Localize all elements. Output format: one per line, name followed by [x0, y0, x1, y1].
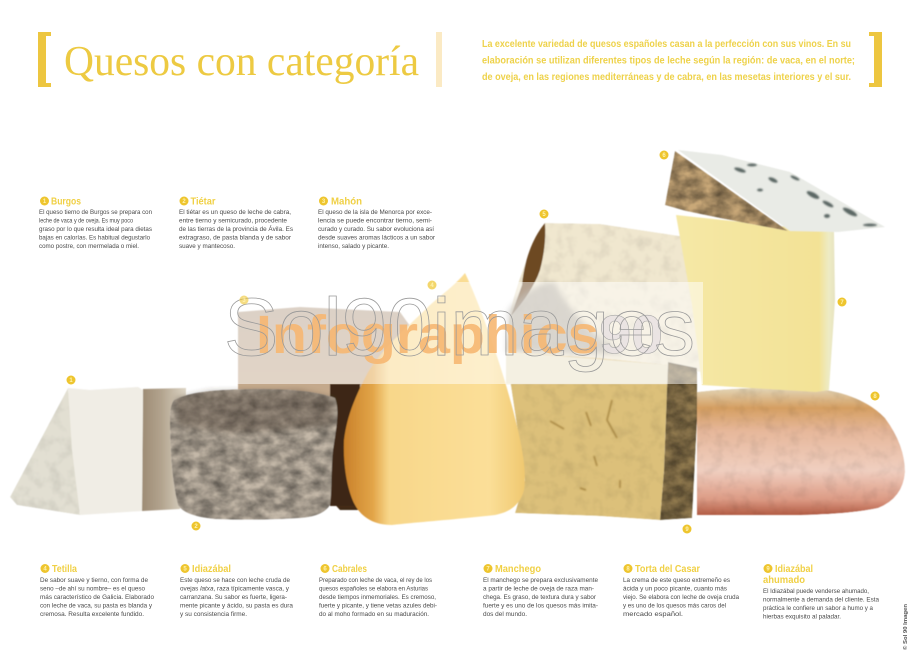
intro text: La excelente variedad de quesos españoles casan a la perfección con sus vinos. En su	[482, 39, 851, 50]
text block: Torta del Casar	[623, 563, 740, 618]
body: Tiétar: de las tierras de la provincia de Ávila. Es	[179, 226, 293, 233]
body: Tiétar	[179, 209, 293, 250]
heading: Idiazábal ahumado	[763, 563, 813, 586]
heading: Tetilla: 4	[43, 566, 47, 572]
body: Cabrales: desde tiempos inmemoriales. Es cremoso,	[319, 594, 436, 601]
body: Burgos: El queso tierno de Burgos se prepara con	[39, 209, 153, 216]
body: Cabrales: Preparado con leche de vaca, el rey de los	[319, 577, 432, 584]
text block: Tetilla	[40, 563, 155, 618]
body: Manchego: El manchego se prepara exclusivamente	[483, 577, 599, 584]
heading: Manchego: 7	[486, 566, 490, 572]
body: Idiazábal ahumado: El Idiazábal puede venderse ahumado,	[763, 588, 869, 595]
heading: Idiazábal ahumado: Idiazábal	[775, 563, 813, 575]
heading: Burgos	[40, 196, 81, 208]
body: Idiazábal ahumado	[763, 588, 880, 620]
text block: Manchego	[483, 563, 599, 618]
body: Idiazábal ahumado: hierbas exquisito al paladar.	[763, 614, 841, 620]
body: Mahón: desde suaves aromas lácticos a un sabor	[318, 234, 435, 242]
body: Torta del Casar: mercado español.	[623, 611, 683, 618]
heading: Torta del Casar: Torta del Casar	[635, 563, 700, 575]
text block: Tiétar	[179, 196, 293, 250]
body: Torta del Casar: ácida y un poco picante, cuanto más	[623, 586, 727, 592]
watermark Sol90images: Sol90images	[224, 282, 695, 373]
body: Manchego	[483, 577, 599, 618]
body: Tiétar: El tiétar es un queso de leche de cabra,	[179, 209, 291, 216]
cheese number markers: 1	[69, 378, 73, 384]
watermark panel	[225, 282, 703, 384]
title divider bar	[436, 32, 442, 87]
cheese 6: Cabrales blue wedge	[665, 150, 885, 232]
cheese number markers: 5	[542, 212, 546, 218]
cheese 3: Mahón back block	[238, 307, 420, 510]
cheese 1: Burgos white wedge	[10, 387, 186, 515]
watermark Infographics90: Infographics 90	[256, 305, 663, 365]
body: Manchego: a partir de leche de oveja de raza man-	[483, 586, 594, 592]
credit: © Sol 90 Imagen	[902, 603, 909, 650]
body: Mahón	[318, 209, 435, 250]
heading: Idiazábal ahumado: ahumado	[763, 574, 805, 586]
body: Burgos: como postre, con mermelada o miel.	[39, 243, 139, 250]
cheese number markers: 4	[430, 283, 434, 289]
heading: Mahón	[319, 196, 362, 208]
intro text: elaboración se utilizan diferentes tipos de leche según la región: de vaca, en el norte;	[482, 56, 855, 66]
heading: Tiétar: 2	[182, 199, 186, 205]
watermark	[224, 282, 703, 384]
heading: Cabrales: 6	[323, 566, 327, 572]
body: Torta del Casar: y es uno de los quesos más caros del	[623, 602, 726, 610]
body: Tetilla: seno –de ahí su nombre– es el queso	[40, 586, 146, 592]
body: Torta del Casar	[623, 577, 740, 618]
cheese group photo	[10, 150, 905, 525]
body: Mahón: El queso de la isla de Menorca por exce-	[318, 209, 432, 216]
heading: Burgos: 1	[43, 199, 47, 205]
body: Cabrales: fuerte y picante, y tiene vetas azules debi-	[319, 602, 437, 610]
body: Idiazábal ahumado: práctica le confiere un sabor a humo y a	[763, 605, 874, 612]
body: Mahón: lencia se puede encontrar tierno, semi-	[318, 218, 432, 224]
heading: Tetilla: Tetilla	[52, 563, 77, 575]
cheese number markers: 2	[194, 524, 198, 530]
heading: Cabrales: Cabrales	[332, 563, 367, 575]
body: Manchego: fuerte y es uno de los quesos más imita-	[483, 602, 598, 610]
body: Cabrales: do al moho formado en su maduración.	[319, 611, 429, 618]
body: Tiétar: entre tierno y semicurado, procedente	[179, 218, 288, 224]
heading: Idiazábal: 5	[183, 566, 187, 572]
body: Idiazábal	[180, 577, 294, 618]
shadow behind round cheese	[330, 384, 360, 506]
text block: Mahón	[318, 196, 435, 250]
cheese 4: Tetilla yellow wedge	[344, 273, 525, 525]
cheese number markers: 7	[840, 300, 844, 306]
body: Burgos: leche de vaca y de oveja. Es muy poco	[39, 218, 133, 224]
right bracket	[869, 32, 882, 87]
body: Tetilla: más característico de Galicia. Elaborado	[40, 594, 155, 601]
text block: Cabrales	[319, 563, 437, 618]
heading: Idiazábal: Idiazábal	[192, 563, 231, 575]
header	[38, 32, 882, 87]
heading: Burgos: Burgos	[51, 196, 81, 208]
body: Burgos: graso por lo que resulta ideal para dietas	[39, 226, 152, 233]
body: Idiazábal ahumado: normalmente a demanda del cliente. Esta	[763, 596, 880, 604]
body: Burgos	[39, 209, 153, 250]
heading: Mahón: Mahón	[331, 196, 362, 208]
cheese number markers: 9	[685, 527, 689, 533]
heading: Tiétar	[180, 196, 216, 208]
body: Manchego: dos del mundo.	[483, 611, 527, 618]
body: Burgos: bajas en calorías. Es habitual degustarlo	[39, 234, 151, 242]
text block: Idiazábal	[180, 563, 294, 618]
left bracket	[38, 32, 51, 87]
cheese 9: Idiazábal ahumado block	[506, 352, 697, 520]
cheese number markers: 8	[873, 394, 877, 400]
cheese number markers	[66, 150, 880, 534]
text block: Idiazábal ahumado	[763, 563, 880, 620]
body: Idiazábal: mente picante y ácido, su pasta es dura	[180, 602, 294, 610]
body: Cabrales: quesos españoles se elabora en Asturias	[319, 586, 428, 592]
intro text: de oveja, en las regiones mediterráneas y de cabra, en las mesetas interiores y el sur.	[482, 72, 851, 83]
body: Cabrales	[319, 577, 437, 618]
heading: Tiétar: Tiétar	[190, 196, 216, 208]
cheese number markers: 6	[662, 153, 666, 159]
cheese 2: Tiétar round	[170, 389, 337, 520]
body: Tetilla: con leche de vaca, su pasta es blanda y	[40, 602, 153, 610]
cheese 5: Idiazábal top wedge	[505, 223, 702, 372]
body: Tiétar: extragraso, de pasta blanda y de sabor	[179, 234, 291, 242]
heading: Idiazábal	[180, 563, 231, 575]
body: Idiazábal: ovejas latxa, raza típicamente vasca, y	[180, 586, 290, 592]
body: Torta del Casar: La crema de este queso extremeño es	[623, 577, 730, 584]
body: Tetilla: cremosa. Resulta excelente fundido.	[40, 611, 144, 618]
heading: Torta del Casar: 8	[626, 566, 630, 572]
heading: Idiazábal ahumado: 9	[766, 566, 770, 572]
heading: Mahón: 3	[322, 199, 326, 205]
cheese 8: Torta del Casar pink round	[697, 388, 905, 515]
cheese 7: Manchego yellow block	[676, 215, 835, 392]
body: Tetilla: De sabor suave y tierno, con forma de	[40, 577, 149, 584]
heading: Manchego: Manchego	[495, 563, 541, 575]
body: Tetilla	[40, 577, 155, 618]
body: Mahón: curado y curado. Su sabor evoluciona así	[318, 226, 434, 233]
body: Idiazábal: carranzana. Su sabor es fuerte, ligera-	[180, 594, 287, 601]
body: Tiétar: suave y mantecoso.	[179, 243, 235, 250]
title: Quesos con categoría	[64, 39, 419, 85]
body: Idiazábal: y su consistencia firme.	[180, 611, 247, 618]
body: Idiazábal: Este queso se hace con leche cruda de	[180, 577, 291, 584]
cheese number markers: 3	[242, 298, 246, 304]
heading: Cabrales	[320, 563, 367, 575]
intro text	[482, 39, 855, 83]
heading: Tetilla	[40, 563, 77, 575]
body: Manchego: chega. Es graso, de textura dura y sabor	[483, 594, 596, 601]
text block: Burgos	[39, 196, 153, 250]
body: Mahón: intenso, salado y picante.	[318, 243, 389, 250]
body: Torta del Casar: viejo. Se elabora con leche de oveja cruda	[623, 594, 740, 601]
